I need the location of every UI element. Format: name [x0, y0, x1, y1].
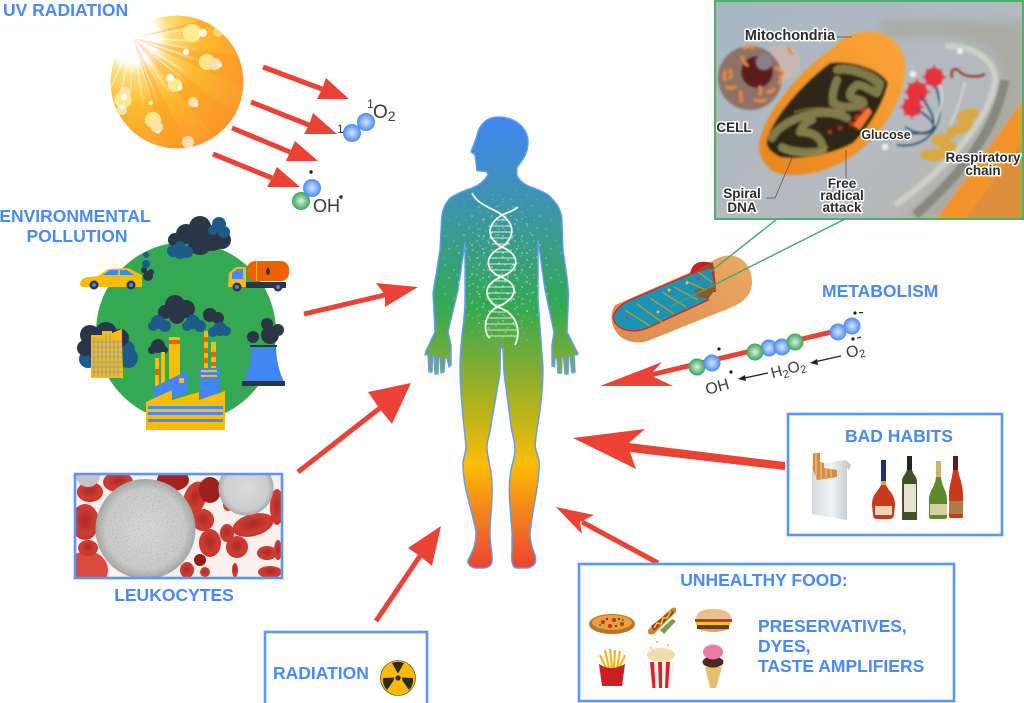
icon: sun: [110, 16, 244, 148]
heading: UV radiation: UV RADIATION: [3, 0, 128, 20]
panel labels: Free: [828, 176, 857, 191]
arrow: pollution to body: [304, 283, 418, 314]
panel labels: Glucose: [861, 128, 911, 142]
heading: unhealthy food: UNHEALTHY FOOD:: [680, 570, 848, 590]
car: [80, 252, 154, 290]
arrow: UV to singlet oxygen 1: [263, 67, 349, 99]
icon: rose wine bottle: [949, 456, 963, 518]
panel labels: radical: [820, 188, 864, 203]
panel: unhealthy food: [579, 564, 954, 701]
formula: superoxide: 2: [858, 348, 867, 361]
arrow: UV to hydroxyl: [213, 154, 300, 187]
icon: cigarette pack: [812, 453, 851, 520]
reaction arrow: H2O2 to OH: [738, 373, 768, 381]
panel labels: Respiratory: [945, 150, 1021, 165]
orange outer membrane: [935, 100, 1023, 219]
formula: OH radical: OH: [704, 376, 731, 399]
tanker truck: [228, 261, 289, 292]
icon: popcorn: [647, 641, 675, 688]
arrow: unhealthy food to body: [556, 507, 658, 563]
centre smoke clouds: [148, 295, 231, 354]
cell: [770, 45, 800, 80]
formula: hydrogen peroxide: O: [786, 358, 802, 378]
heading: bad habits: BAD HABITS: [845, 426, 953, 446]
icon: cognac bottle: [872, 460, 895, 519]
arrow: UV ray 3: [232, 128, 318, 161]
formula: superoxide: O: [844, 342, 861, 362]
panel: bad habits: [788, 414, 1002, 535]
corner leukocyte: [76, 475, 100, 487]
red blood cells: [76, 475, 281, 577]
panel: mitochondrion cell illustration: [715, 1, 1023, 219]
icon: pizza: [589, 614, 635, 634]
buildings with smoke: [77, 322, 138, 378]
body silhouette: [425, 117, 578, 568]
panel labels: [716, 28, 1021, 215]
mitochondrion body: [759, 31, 905, 175]
illustration: polluted planet: [77, 216, 289, 430]
molecule: singlet oxygen: [337, 97, 396, 142]
heading: environmental pollution: [0, 206, 151, 246]
text: additives list: PRESERVATIVES,: [758, 616, 907, 636]
planet: [96, 242, 276, 422]
text: additives list: DYES,: [758, 636, 811, 656]
molecule: singlet oxygen: 2: [388, 108, 396, 124]
top smoke cloud: [167, 216, 231, 259]
panel labels: chain: [965, 163, 1001, 178]
molecules: metabolism chain: [688, 311, 863, 376]
formula: hydrogen peroxide: 2: [799, 363, 808, 377]
numbered markers: [881, 47, 964, 151]
formula: hydrogen peroxide: H: [769, 363, 784, 382]
heading: metabolism: METABOLISM: [822, 281, 938, 301]
icon: fries: [599, 649, 625, 686]
heading: environmental pollution: POLLUTION: [26, 226, 128, 246]
panel labels: attack: [822, 200, 862, 215]
reaction arrow: O2 to H2O2: [810, 356, 841, 365]
arrow: bad habits to body: [573, 429, 785, 470]
icon: hot dog: [648, 608, 676, 634]
molecule: singlet oxygen: O: [373, 102, 388, 123]
arrow: leukocytes to body: [298, 383, 411, 472]
small leukocyte: [218, 475, 274, 516]
electron paths: [897, 85, 940, 146]
cooling tower: [242, 318, 285, 386]
panel labels: CELL: [716, 120, 752, 135]
panel labels: DNA: [727, 200, 757, 215]
respiratory chain proteins: [920, 106, 981, 161]
heading: leukocytes: LEUKOCYTES: [114, 585, 234, 605]
DNA sparkle particles: [434, 186, 568, 352]
formula: hydrogen peroxide: 2: [782, 368, 791, 381]
text: additives list: [758, 616, 924, 676]
inner matrix: [767, 62, 888, 158]
DNA double helix: [472, 193, 518, 345]
arrow: UV to singlet oxygen 2: [251, 102, 337, 134]
icon: wine bottle: [902, 456, 917, 520]
icon: mitochondrion: [612, 255, 752, 342]
icon: radiation symbol: [380, 660, 416, 696]
arrow: metabolism chain to body: [600, 330, 840, 386]
red free-radical bursts: [903, 68, 943, 116]
molecule: singlet oxygen: 1: [367, 97, 374, 111]
text: additives list: TASTE AMPLIFIERS: [758, 656, 924, 676]
human body figure: [424, 117, 580, 568]
molecule: singlet oxygen: 1: [337, 122, 344, 136]
cristae folds: [772, 70, 880, 152]
arrow: radiation to body: [376, 526, 441, 621]
molecule: hydroxyl radical: [292, 170, 343, 216]
factory: [146, 331, 225, 430]
connector lines: zoom callout: [670, 219, 845, 307]
heading: radiation: RADIATION: [273, 663, 369, 683]
icon: burger: [695, 609, 732, 632]
molecule: hydroxyl radical: OH: [313, 196, 340, 216]
heading: environmental pollution: ENVIRONMENTAL: [0, 206, 151, 226]
large leukocyte: [96, 479, 196, 579]
panel labels: Spiral: [723, 186, 761, 201]
panel: radiation box: [265, 632, 427, 703]
icon: champagne bottle: [929, 461, 947, 519]
icon: ice cream: [702, 644, 724, 688]
membrane bands: [880, 20, 1023, 219]
panel labels: Mitochondria: [745, 28, 836, 44]
panel: leukocytes image: [74, 472, 284, 580]
